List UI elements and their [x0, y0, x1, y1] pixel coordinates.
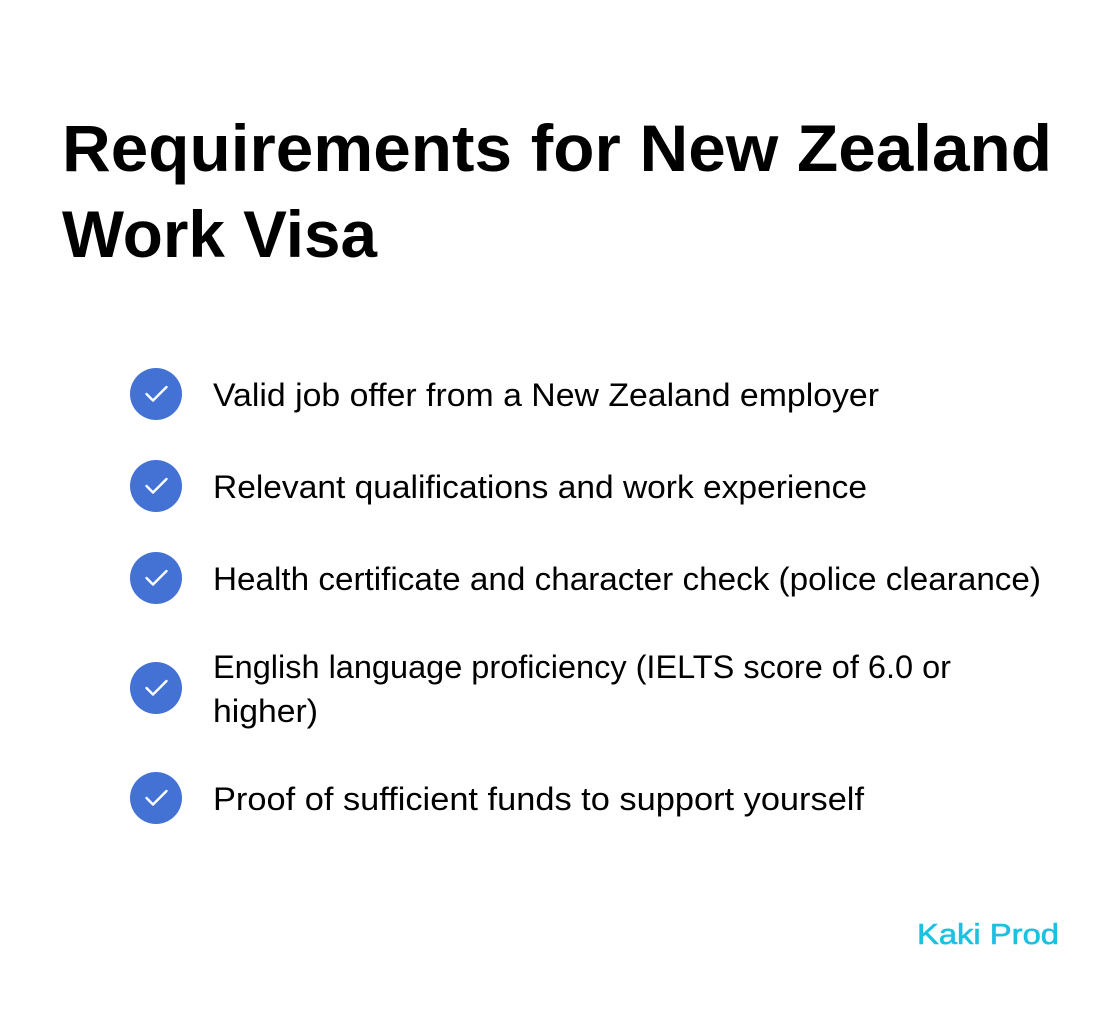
icon: check badge 3 — [130, 552, 182, 604]
requirement 4 — [130, 649, 951, 729]
logo: Kaki Prod: Kaki Prod — [917, 919, 1059, 951]
title: Requirements for New Zealand — [62, 111, 1052, 185]
icon: check badge 1 — [130, 368, 182, 420]
requirement 5 — [130, 772, 864, 824]
text: requirement 4: higher) — [213, 693, 318, 729]
text: requirement 3: Health certificate and character check (police clearance) — [213, 561, 1041, 597]
title — [62, 111, 1052, 271]
title: Work Visa — [62, 197, 378, 271]
text: requirement 1: Valid job offer from a New Zealand employer — [213, 377, 879, 413]
icon: check badge 4 — [130, 662, 182, 714]
text: requirement 5: Proof of sufficient funds to support yourself — [213, 781, 864, 817]
requirement 1 — [130, 368, 879, 420]
text: requirement 2: Relevant qualifications and work experience — [213, 469, 867, 505]
icon: check badge 5 — [130, 772, 182, 824]
requirement 2 — [130, 460, 867, 512]
requirement 3 — [130, 552, 1041, 604]
icon: check badge 2 — [130, 460, 182, 512]
text: requirement 4 — [213, 649, 951, 729]
text: requirement 4: English language proficiency (IELTS score of 6.0 or — [213, 649, 951, 685]
